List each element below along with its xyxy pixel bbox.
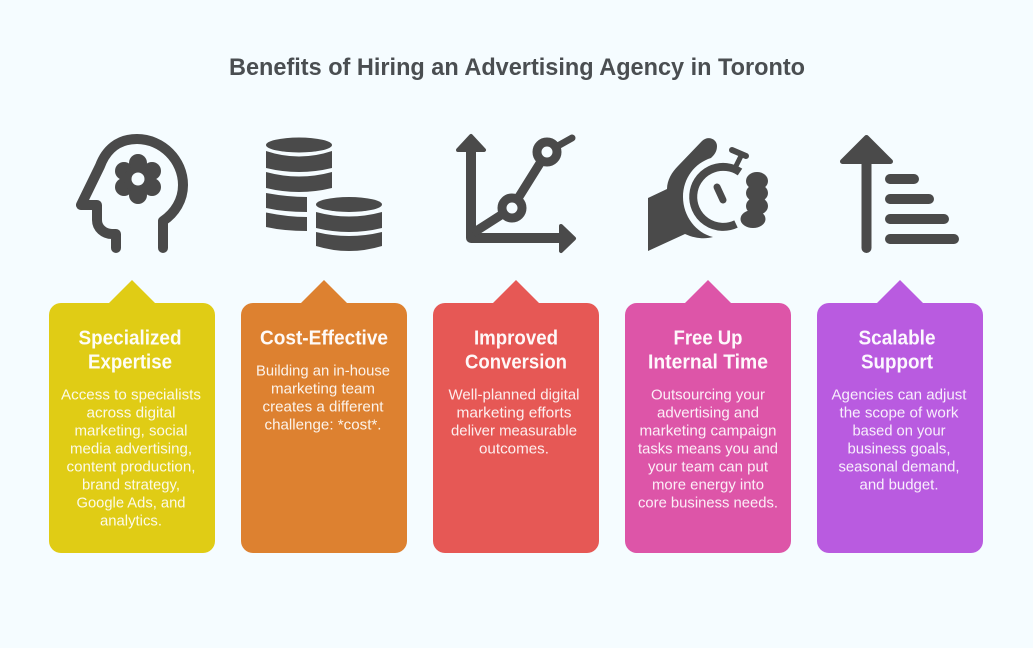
heading: Support xyxy=(861,352,933,374)
body text: Access to specialists xyxy=(61,388,201,404)
heading: Scalable xyxy=(858,328,936,350)
body text: the scope of work xyxy=(840,406,959,422)
body text: analytics. xyxy=(100,514,162,530)
body text xyxy=(256,364,390,434)
body text: outcomes. xyxy=(479,442,549,458)
body text: business goals, xyxy=(848,442,950,458)
body text: across digital xyxy=(86,406,176,422)
body text: media advertising, xyxy=(70,442,192,458)
body text: based on your xyxy=(852,424,946,440)
panel: free up internal time xyxy=(625,280,791,553)
body text: Outsourcing your xyxy=(651,388,765,404)
card shape xyxy=(817,280,983,553)
body text: deliver measurable xyxy=(451,424,577,440)
body text: challenge: *cost*. xyxy=(264,418,382,434)
heading: Improved xyxy=(474,328,558,350)
body text: Agencies can adjust xyxy=(832,388,966,404)
panel: scalable support xyxy=(817,280,983,553)
body text: Building an in-house xyxy=(256,364,390,380)
heading: Free Up xyxy=(674,328,742,350)
card shape xyxy=(625,280,791,553)
card shape xyxy=(49,280,215,553)
body text xyxy=(832,388,966,494)
heading xyxy=(648,328,768,374)
icon: hand holding stopwatch xyxy=(648,138,768,251)
body text: brand strategy, xyxy=(82,478,180,494)
body text: seasonal demand, xyxy=(838,460,960,476)
heading xyxy=(78,328,182,374)
card shape xyxy=(433,280,599,553)
heading xyxy=(858,328,936,374)
heading xyxy=(465,328,567,374)
body text: Well-planned digital xyxy=(448,388,580,404)
body text: and budget. xyxy=(860,478,938,494)
heading: Specialized xyxy=(78,328,182,350)
body text: marketing team xyxy=(271,382,375,398)
body text: creates a different xyxy=(262,400,384,416)
body text: core business needs. xyxy=(638,496,778,512)
card shape xyxy=(241,280,407,553)
panel: cost-effective xyxy=(241,280,407,553)
heading: Expertise xyxy=(88,352,172,374)
icon: arrow up with stepped bars xyxy=(842,138,954,248)
body text: advertising and xyxy=(657,406,759,422)
body text: your team can put xyxy=(648,460,768,476)
body text: content production, xyxy=(66,460,196,476)
body text: marketing efforts xyxy=(456,406,572,422)
icon: coin stacks xyxy=(266,138,382,251)
body text xyxy=(638,388,778,512)
icon: head with flower xyxy=(81,139,183,248)
body text: Google Ads, and xyxy=(76,496,186,512)
icon: growth chart xyxy=(458,136,574,251)
panel: improved conversion xyxy=(433,280,599,553)
heading: Cost-Effective xyxy=(260,328,388,350)
panel: specialized expertise xyxy=(49,280,215,553)
body text: tasks means you and xyxy=(638,442,778,458)
body text: more energy into xyxy=(652,478,764,494)
heading: Internal Time xyxy=(648,352,768,374)
body text: marketing campaign xyxy=(640,424,776,440)
heading: Conversion xyxy=(465,352,567,374)
body text: marketing, social xyxy=(74,424,188,440)
body text xyxy=(61,388,201,530)
body text xyxy=(448,388,580,458)
title: Benefits of Hiring an Advertising Agency in Toronto xyxy=(229,54,805,81)
